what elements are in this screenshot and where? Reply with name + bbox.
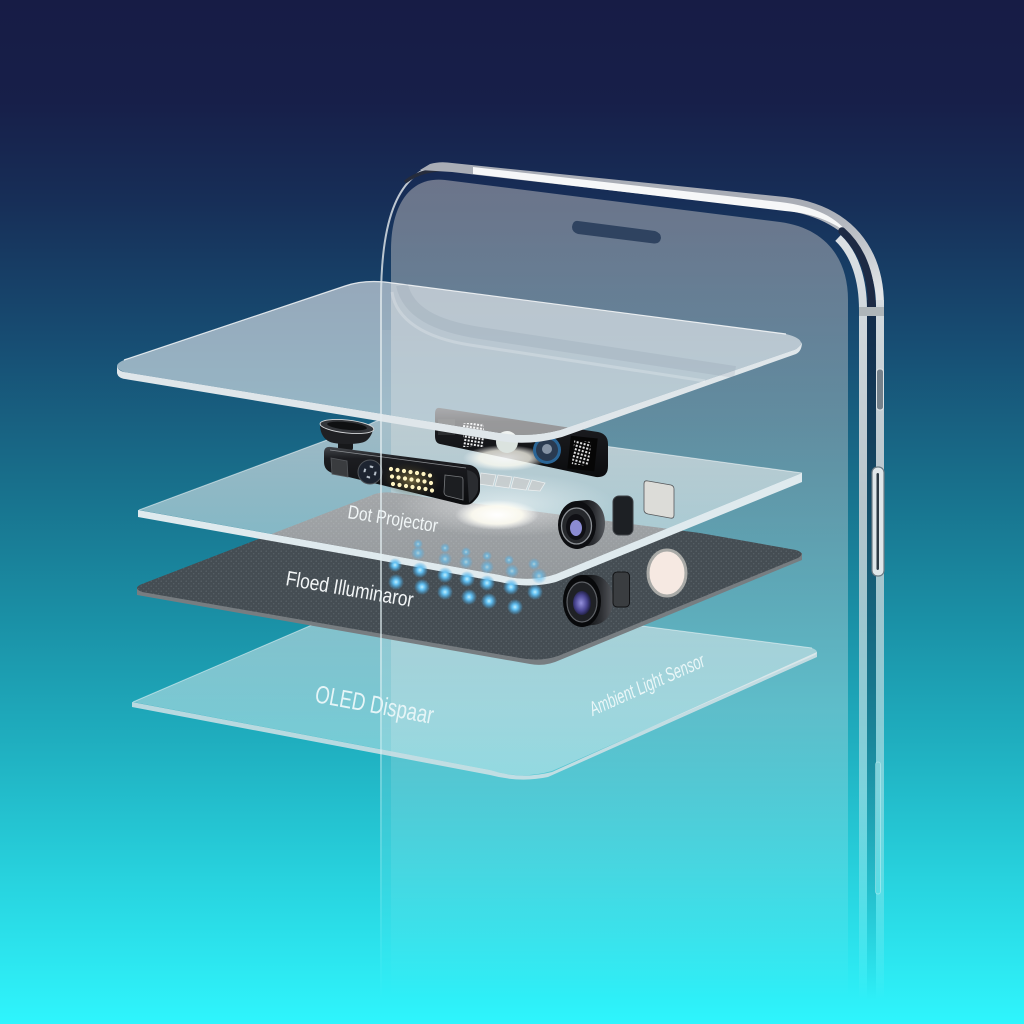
lower side button (872, 467, 884, 576)
layer: OLED display glass (132, 595, 817, 780)
top white band (473, 167, 849, 235)
pill sensor on upper glass (613, 496, 633, 535)
blue lens (533, 436, 561, 464)
antenna band (859, 307, 884, 316)
glow patch (455, 500, 539, 530)
LED back glow (379, 459, 443, 501)
speaker slot (572, 221, 661, 244)
phone screen (391, 180, 848, 1005)
ambient light sensor disc (648, 550, 686, 596)
lens on dark plate (563, 575, 613, 627)
ghost lens (496, 431, 518, 453)
phone frame (381, 162, 884, 1005)
upper side button (876, 369, 884, 410)
ghost dot grid (463, 423, 484, 447)
screen corner seen through plate (402, 285, 735, 372)
inner right frame (838, 238, 863, 1005)
bar square window left (331, 458, 348, 477)
frame gap dark (842, 231, 872, 305)
lens on upper glass (558, 500, 605, 549)
outer right frame (876, 300, 884, 1005)
dark gap on right edge (867, 300, 876, 1005)
bar square window right (444, 475, 463, 500)
blue projected dots (388, 539, 547, 615)
ghost window (438, 419, 455, 435)
label: OLED Display: OLED Dispaar (313, 680, 436, 730)
layer: dark sensor substrate (137, 492, 802, 665)
outer silver frame (420, 162, 884, 305)
label: Flood Illuminator: Floed Illuminaror (284, 567, 415, 612)
small chips (479, 473, 545, 491)
front sensor bar (324, 447, 480, 505)
pill sensor on dark plate (613, 572, 630, 607)
back sensor module (435, 408, 608, 477)
LED grid (389, 467, 434, 493)
top glass plate (117, 282, 802, 443)
soft light on upper glass (395, 473, 615, 537)
faint lower button (876, 762, 880, 894)
phone left edge band (382, 330, 391, 1010)
square dot grid (567, 436, 598, 471)
layer: upper glass plate (138, 418, 802, 586)
corner shadow on left (405, 169, 462, 182)
label: Ambient Light Sensor: Ambient Light Sensor (585, 650, 709, 721)
lit area under lens (463, 445, 547, 471)
knob camera (319, 417, 374, 451)
left thin edge (381, 165, 436, 1005)
square sensor on upper glass (644, 481, 674, 518)
bar round sensor (358, 460, 382, 484)
label: Dot Projector: Dot Projector (346, 502, 440, 537)
